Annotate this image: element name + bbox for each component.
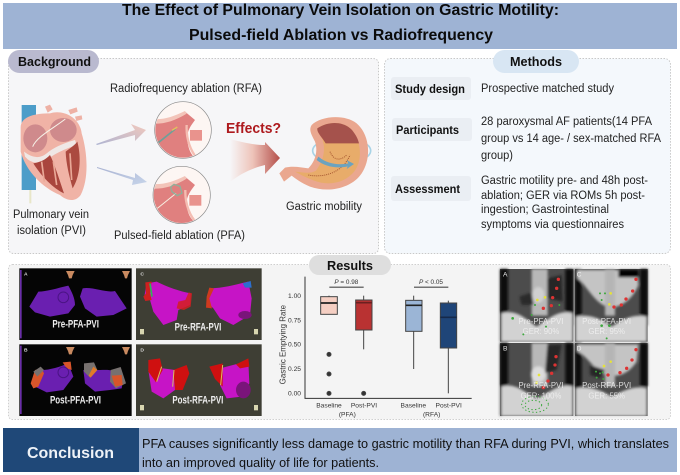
assessment row: symptoms via questionnaires xyxy=(481,219,624,231)
title: The Effect of Pulmonary Vein Isolation on Gastric Motility: xyxy=(122,2,559,19)
x axis labels: Baseline xyxy=(401,403,426,410)
map A: pre-PFA-PVI xyxy=(19,268,132,340)
participants row: group) xyxy=(481,150,513,162)
PFA label: Pulsed-field ablation (PFA) xyxy=(114,230,245,242)
x axis labels: (PFA) xyxy=(339,411,356,418)
map A: pre-PFA-PVI: A xyxy=(24,272,28,278)
map B: post-PFA-PVI xyxy=(19,344,132,416)
radiograph C: Post-PFA-PVI xyxy=(582,317,631,326)
panel: methods xyxy=(384,50,670,254)
conclusion text: PFA causes significantly less damage to gastric motility than RFA during PVI, which translates xyxy=(142,436,669,451)
assessment row xyxy=(391,175,648,231)
radiograph B: GER: 100% xyxy=(521,391,561,400)
conclusion text xyxy=(142,436,669,470)
conclusion label xyxy=(3,428,139,472)
methods heading pill: Methods xyxy=(510,54,562,69)
radiograph C: C xyxy=(577,272,582,279)
box: RFA baseline xyxy=(406,296,422,369)
study design row xyxy=(391,77,614,100)
conclusion label: Conclusion xyxy=(27,445,114,462)
significance brackets xyxy=(329,279,448,288)
PVI label: isolation (PVI) xyxy=(17,225,86,237)
icon: PFA catheter circle xyxy=(152,166,210,225)
PVI label xyxy=(13,209,89,237)
electroanatomic maps xyxy=(19,268,262,416)
map C: pre-RFA-PVI xyxy=(136,268,262,340)
radiograph A: A xyxy=(503,272,508,279)
radiograph A: Pre-PFA-PVI xyxy=(518,317,563,326)
radiograph C xyxy=(575,269,648,342)
title: Pulsed-field Ablation vs Radiofrequency xyxy=(189,27,493,44)
assessment row: ingestion; Gastrointestinal xyxy=(481,204,609,216)
y axis ticks and labels: 0.25 xyxy=(288,366,301,373)
x axis labels: Baseline xyxy=(316,403,342,410)
radiograph D: Post-RFA-PVI xyxy=(582,381,631,390)
methods heading pill xyxy=(493,50,579,73)
assessment row: Gastric motility pre- and 48h post- xyxy=(481,175,648,187)
study design row: Prospective matched study xyxy=(481,83,614,95)
participants row: group vs 14 age- / sex-matched RFA xyxy=(481,133,661,145)
panel: results xyxy=(8,255,670,420)
stomach label: Gastric mobility xyxy=(286,201,362,213)
radiograph A: GER: 90% xyxy=(523,327,559,336)
map D: post-RFA-PVI: D xyxy=(140,348,144,354)
title xyxy=(122,2,559,44)
study design row: Study design xyxy=(395,82,465,96)
map C: pre-RFA-PVI: C xyxy=(140,272,144,278)
y axis ticks and labels: 0.50 xyxy=(288,342,301,349)
radiograph D: D xyxy=(577,345,582,352)
background heading pill: Background xyxy=(18,54,91,69)
radiograph C: GER: 95% xyxy=(588,327,625,336)
map D: post-RFA-PVI: Post-RFA-PVI xyxy=(172,395,223,407)
PVI label: Pulmonary vein xyxy=(13,209,89,221)
x axis labels: Post-PVI xyxy=(436,403,462,410)
participants row: 28 paroxysmal AF patients(14 PFA xyxy=(481,116,652,128)
assessment row: Assessment xyxy=(395,182,460,196)
abdominal radiographs xyxy=(500,269,648,416)
arrow to PFA xyxy=(97,167,147,185)
y axis ticks and labels: 0.75 xyxy=(288,317,301,324)
header banner xyxy=(3,2,677,49)
x axis labels xyxy=(316,403,462,418)
map B: post-PFA-PVI: Post-PFA-PVI xyxy=(50,395,101,407)
big arrow to stomach xyxy=(230,139,280,182)
chart axes xyxy=(305,277,472,398)
box plot: gastric emptying rate xyxy=(277,277,472,418)
map D: post-RFA-PVI xyxy=(136,344,262,416)
y axis title: Gastric Emptying Rate xyxy=(277,305,287,384)
radiograph D: GER: 55% xyxy=(588,391,625,400)
box: PFA baseline xyxy=(321,296,337,395)
participants row xyxy=(392,116,661,162)
radiograph A xyxy=(500,269,573,342)
icon: heart with pulmonary vein isolation xyxy=(21,105,87,203)
significance brackets: P = 0.98 xyxy=(334,279,359,286)
y axis ticks and labels xyxy=(288,293,301,398)
participants row: Participants xyxy=(396,123,459,137)
x axis labels: (RFA) xyxy=(423,411,440,418)
map B: post-PFA-PVI: B xyxy=(24,348,28,354)
y axis ticks and labels: 0.00 xyxy=(288,391,301,398)
arrow to RFA xyxy=(96,124,146,145)
panel: background xyxy=(8,50,378,254)
radiograph D xyxy=(575,343,648,416)
results heading pill: Results xyxy=(327,258,373,273)
icon: stomach xyxy=(279,117,371,190)
significance brackets: P < 0.05 xyxy=(419,279,443,286)
RFA label: Radiofrequency ablation (RFA) xyxy=(110,83,262,95)
assessment row: ablation; GER via ROMs 5h post- xyxy=(481,190,645,202)
map A: pre-PFA-PVI: Pre-PFA-PVI xyxy=(52,319,99,331)
y axis ticks and labels: 1.00 xyxy=(288,293,301,300)
radiograph B: Pre-RFA-PVI xyxy=(518,381,563,390)
icon: RFA catheter circle xyxy=(153,102,211,162)
box: RFA post-PVI xyxy=(440,301,457,393)
x axis labels: Post-PVI xyxy=(351,403,377,410)
background heading pill xyxy=(8,50,99,73)
conclusion text: into an improved quality of life for patients. xyxy=(142,455,379,470)
radiograph B: B xyxy=(503,345,508,352)
effects question: Effects? xyxy=(226,121,281,137)
results heading pill xyxy=(309,255,391,275)
radiograph B xyxy=(500,343,573,416)
conclusion banner xyxy=(3,428,677,472)
box: PFA post-PVI xyxy=(356,296,372,395)
map C: pre-RFA-PVI: Pre-RFA-PVI xyxy=(175,321,221,333)
